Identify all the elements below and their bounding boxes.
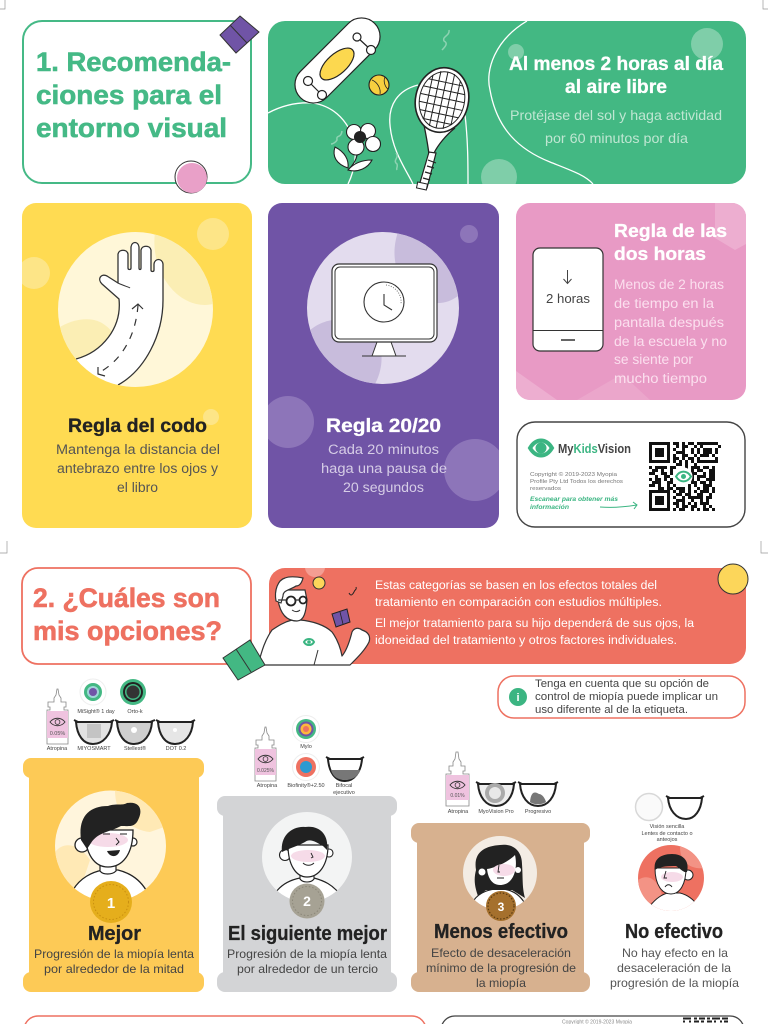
icon: single vision glasses (666, 796, 704, 819)
icon: Biofinity lens (292, 754, 320, 780)
text: outdoors description: Protéjase del sol y haga actividad (510, 107, 722, 123)
text: elbow rule description: Mantenga la distancia del (56, 442, 220, 457)
text: categories explanation: El mejor tratamiento para su hijo dependerá de sus ojos, la (375, 618, 695, 630)
illustration: monitor with clock (307, 232, 459, 384)
heading: section 2: 2. ¿Cuáles son (33, 583, 220, 613)
icon: atropine 0.05% (47, 689, 68, 744)
label: bifocal: Bifocal (336, 783, 352, 789)
text: categories explanation: tratamiento en comparación con estudios múltiples. (375, 597, 662, 609)
text: categories explanation: Estas categorías se basen en los efectos totales del (375, 580, 657, 592)
heading: two hour rule (614, 220, 727, 264)
label: atropina: Atropina (448, 809, 469, 815)
icon: bifocal glasses (326, 757, 364, 781)
text: not effective description: progresión de la miopía (610, 976, 739, 990)
group: second best icons (255, 716, 364, 796)
text: outdoors heading: al aire libre (565, 77, 667, 98)
text: note: uso diferente al de la etiqueta. (535, 704, 688, 716)
label: single vision (641, 824, 693, 843)
icon: forearm (76, 242, 164, 386)
text: less effective description: Efecto de desaceleración (431, 946, 571, 960)
text: two hour description: mucho tiempo (614, 371, 707, 386)
icon: MiYOSMART glasses (74, 720, 114, 744)
text: copyright: Profile Pty Ltd Todos los derechos (530, 479, 623, 485)
group: less effective icons (446, 752, 558, 815)
heading: less effective: Menos efectivo (434, 921, 568, 943)
heading: not effective: No efectivo (625, 921, 723, 943)
group: not effective (610, 794, 739, 990)
label: atropina: Atropina (47, 746, 68, 752)
illustration: skateboard (287, 10, 388, 111)
text: note: Tenga en cuenta que su opción de (535, 678, 709, 690)
label: MIYOSMART: MIYOSMART (77, 746, 111, 752)
text: categories explanation (375, 580, 695, 647)
icon: atropine 0.025%: 0.025% (257, 768, 275, 774)
text: second best description (227, 947, 387, 976)
icon: yellow circle (718, 564, 748, 594)
heading: best: Mejor (88, 923, 141, 945)
text: two hour description: se siente por (614, 352, 694, 367)
heading: section 1: entorno visual (36, 113, 227, 143)
heading: section 2: mis opciones? (33, 616, 222, 646)
label: Stellest: Stellest® (124, 745, 146, 752)
illustration: tennis ball (369, 75, 389, 95)
icon: small purple book (332, 609, 350, 627)
text: two hour description: pantalla después (614, 315, 724, 330)
panel: bottom callout (24, 1016, 426, 1024)
heading: section 2 (33, 583, 222, 646)
icon: green book (223, 640, 265, 680)
logo text: MyKidsVision (558, 441, 631, 456)
label: MiSight: MiSight® 1 day (77, 708, 115, 715)
text: copyright: reservados (530, 486, 561, 492)
text: outdoors description: por 60 minutos por día (545, 130, 688, 146)
panel: section 1 title (23, 16, 259, 193)
icon: Stellest glasses (115, 720, 155, 744)
text: best description: Progresión de la miopía lenta (34, 947, 194, 961)
avatar: sad boy (638, 845, 706, 915)
panel: bottom MyKidsVision card (441, 1016, 744, 1024)
label: single vision: anteojos (657, 837, 678, 843)
icon: DOT glasses (156, 720, 195, 744)
decorative squiggle (349, 587, 356, 595)
text: note (535, 678, 718, 716)
panel: 20/20 rule (262, 203, 506, 528)
crop marks (0, 0, 768, 553)
icon: atropine 0.05%: 0.05% (50, 731, 65, 737)
icon: MyoVision Pro glasses (476, 782, 516, 806)
label: atropina: Atropina (257, 783, 278, 789)
label: Biofinity: Biofinity®+2.50 (287, 782, 325, 789)
icon: info (509, 688, 527, 706)
text: scan prompt: Escanear para obtener más (530, 496, 618, 503)
icon: logo eye (530, 440, 552, 456)
text: copyright (530, 471, 623, 492)
heading: 20/20 rule: Regla 20/20 (326, 416, 441, 437)
avatar: smiling boy: 1 (107, 895, 115, 912)
icon: MiSight contact lens (80, 679, 106, 705)
text: two hour description: de tiempo en la (614, 296, 715, 311)
text: less effective description: la miopía (476, 976, 526, 990)
text: not effective description: desaceleración de la (617, 961, 731, 975)
text: outdoors description (510, 107, 722, 146)
heading: elbow rule: Regla del codo (68, 416, 207, 437)
label: progresivo: Progresivo (525, 809, 551, 815)
icon: Mylo lens (292, 716, 320, 742)
text: scan prompt: información (530, 504, 569, 511)
text: best description (34, 947, 194, 976)
heading: two hour rule: dos horas (614, 243, 706, 264)
avatar: girl with long hair: 3 (498, 900, 505, 914)
panel: section 2 title (22, 568, 251, 664)
text: second best description: por alrededor de un tercio (237, 962, 378, 976)
panel: options explanation (269, 557, 748, 664)
text: scan prompt (530, 496, 618, 511)
avatar: girl with short hair: 2 (303, 893, 311, 909)
text: elbow rule description: antebrazo entre los ojos y (57, 461, 218, 476)
text: note: control de miopía puede implicar un (535, 691, 718, 703)
panel: less effective podium (411, 823, 590, 992)
text: two hour description (614, 277, 727, 386)
label: single vision: Visión sencilla (650, 824, 685, 830)
text: categories explanation: idoneidad del tratamiento y otros factores individuales. (375, 635, 677, 647)
illustration: flower (334, 124, 380, 171)
panel: elbow rule (18, 203, 252, 528)
text: elbow rule description: el libro (117, 480, 158, 495)
icon: Ortho-k lens (120, 679, 146, 705)
heading: section 1 (36, 47, 231, 143)
text: 20/20 description: haga una pausa de (321, 461, 447, 476)
text: elbow rule description (56, 442, 220, 495)
text: less effective description: mínimo de la progresión de (426, 961, 576, 975)
icon: clear contact lens (636, 794, 662, 820)
label: bifocal: ejecutivo (333, 790, 355, 796)
arrow: to QR (600, 502, 637, 509)
illustration: man with glasses and book (223, 577, 370, 680)
heading: section 1: 1. Recomenda- (36, 47, 231, 77)
label: single vision: Lentes de contacto o (641, 831, 693, 837)
text: 20/20 description: Cada 20 minutos (328, 442, 439, 457)
illustration: forearm circle (58, 232, 213, 387)
avatar: girl with short hair (262, 812, 352, 918)
label: DOT 0.2: DOT 0.2 (166, 746, 186, 752)
label: Orto-k: Orto-k (127, 709, 143, 715)
group: best options icons (47, 679, 195, 752)
text: copyright: Copyright © 2019-2023 Myopia (530, 471, 618, 478)
icon: progressive glasses (518, 782, 558, 806)
QR code fragment (683, 1018, 728, 1022)
icon: pink ball (175, 161, 207, 193)
label: bifocal (333, 783, 355, 796)
text: two hour description: de la escuela y no (614, 334, 727, 349)
icon: atropine 0.01%: 0.01% (450, 793, 465, 799)
text: second best description: Progresión de la miopía lenta (227, 947, 387, 961)
icon: info: i (516, 692, 520, 704)
panel: MyKidsVision card (517, 422, 745, 527)
panel: two hour rule (516, 203, 746, 400)
label: Mylo: Mylo (300, 744, 312, 750)
text: 20/20 description: 20 segundos (343, 480, 424, 495)
label: MyoVision Pro: MyoVision Pro (478, 809, 514, 815)
QR code (649, 444, 721, 510)
panel: second best podium (217, 796, 397, 992)
icon: phone 2 hours: 2 horas (546, 292, 590, 306)
heading: two hour rule: Regla de las (614, 220, 727, 241)
text: two hour description: Menos de 2 horas (614, 277, 724, 292)
text: outdoors heading: Al menos 2 horas al día (509, 54, 723, 75)
heading: second best: El siguiente mejor (228, 923, 387, 945)
avatar: smiling boy (55, 790, 166, 923)
text: 20/20 description (321, 442, 447, 495)
illustration: tennis racket (409, 63, 475, 190)
heading: section 1: ciones para el (36, 80, 222, 110)
icon: yellow coin (313, 577, 325, 589)
text: outdoors heading (509, 54, 723, 98)
text: less effective description (426, 946, 576, 990)
callout: off-label note (498, 676, 745, 718)
panel: outdoors (268, 10, 746, 195)
text: best description: por alrededor de la mitad (44, 962, 184, 976)
panel: best podium (23, 758, 204, 992)
avatar: girl with long hair (463, 836, 537, 921)
icon: phone 2 hours (533, 248, 603, 351)
icon: purple book (220, 16, 259, 53)
text: not effective description: No hay efecto en la (622, 946, 728, 960)
text: not effective description (610, 946, 739, 990)
